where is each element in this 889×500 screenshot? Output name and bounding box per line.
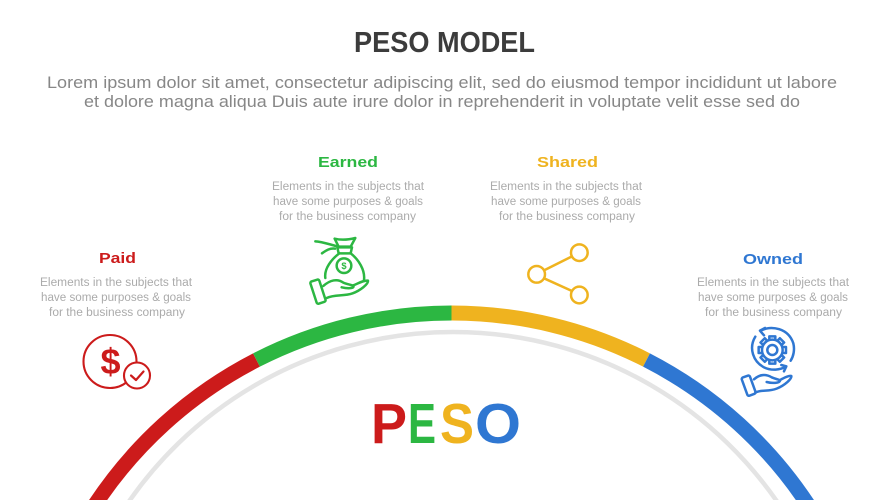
icon: dollar coin with check: $ [100,341,121,382]
text block: shared: have some purposes & goals [491,196,641,208]
panel: earned [272,154,425,304]
arc segment: shared [452,313,646,360]
center word PESO: E [408,392,436,456]
text block: paid [40,277,193,319]
arc segment: earned [256,313,452,360]
text block: paid: for the business company [49,307,185,319]
title: PESO MODEL [354,27,535,59]
heading: owned: Owned [743,251,803,268]
icon: money bag on hand [310,238,368,304]
icon: dollar coin with check [84,335,150,388]
heading: paid: Paid [99,250,136,267]
subtitle text [47,73,837,111]
text block: earned: Elements in the subjects that [272,181,425,193]
text block: paid: Elements in the subjects that [40,277,193,289]
icon: share nodes [528,244,588,303]
arc segment: paid [92,360,256,500]
panel: owned [697,251,850,396]
panel: shared [490,154,643,303]
subtitle text: Lorem ipsum dolor sit amet, consectetur adipiscing elit, sed do eiusmod tempor incididunt ut labore [47,73,837,92]
text block: earned: for the business company [279,211,416,223]
text block: paid: have some purposes & goals [41,292,191,304]
heading: shared: Shared [537,154,598,171]
text block: owned: Elements in the subjects that [697,277,850,289]
text block: shared [490,181,643,223]
center word PESO [371,392,521,456]
text block: earned [272,181,425,223]
center word PESO: S [440,392,474,456]
center word PESO: P [371,392,407,456]
icon: gear cycle on hand [741,328,794,396]
inner grey arc [123,332,783,500]
text block: owned: for the business company [705,307,842,319]
center word PESO: O [475,392,521,456]
subtitle text: et dolore magna aliqua Duis aute irure dolor in reprehenderit in voluptate velit esse sed do [84,92,800,111]
text block: owned: have some purposes & goals [698,292,848,304]
text block: shared: Elements in the subjects that [490,181,643,193]
icon: money bag on hand: $ [341,261,347,271]
heading: earned: Earned [318,154,378,171]
text block: shared: for the business company [499,211,635,223]
arc segment: owned [646,360,812,500]
text block: owned [697,277,850,319]
panel: paid [40,250,193,388]
text block: earned: have some purposes & goals [273,196,423,208]
segmented outer arc [92,313,812,500]
